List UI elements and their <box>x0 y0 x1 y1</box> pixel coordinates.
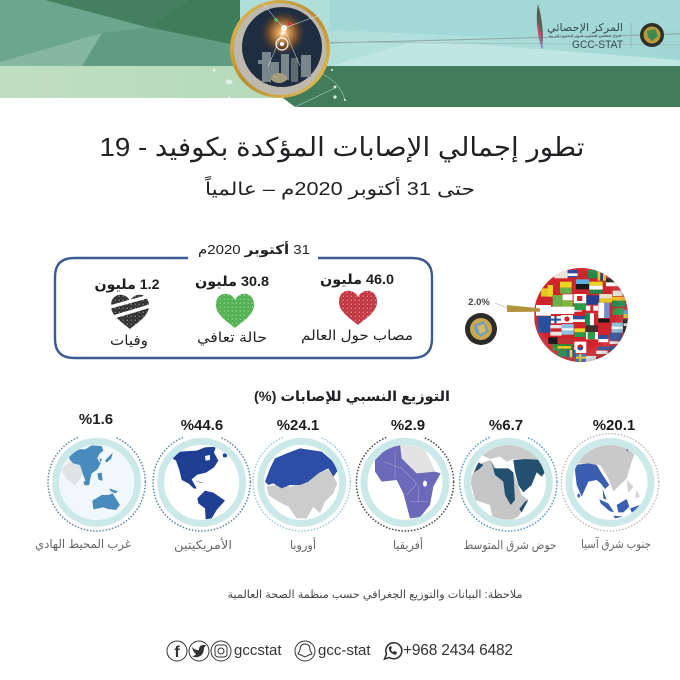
map group: left half <box>48 434 350 531</box>
region labels <box>35 536 651 553</box>
label: Africa: أفريقيا <box>393 537 423 553</box>
callout highlight <box>540 308 582 313</box>
subtitle: حتى 31 أكتوبر 2020م – عالمياً <box>204 176 475 200</box>
handle: gccstat: gccstat <box>234 642 282 659</box>
value: Americas: %44.6 <box>181 417 223 434</box>
callout line <box>495 303 507 308</box>
stat: infected <box>301 271 413 344</box>
GCC-STAT logo: المركز الإحصائي <box>547 22 623 34</box>
value: Eastern Mediterranean: %6.7 <box>489 417 523 434</box>
label: Western Pacific: غرب المحيط الهادي <box>35 537 131 552</box>
GCC-STAT logo: لدول مجلس التعاون لدول الخليج العربية <box>548 34 622 38</box>
value: Africa: %2.9 <box>391 417 425 434</box>
stat: recovered: 30.8 مليون <box>195 273 269 290</box>
stat: infected: 46.0 مليون <box>320 271 394 288</box>
footer contacts <box>167 641 513 661</box>
icon: facebook <box>167 641 187 661</box>
callout wedge: GCC share <box>507 305 561 312</box>
flag globe <box>465 267 632 367</box>
label: South-East Asia: جنوب شرق آسيا <box>581 536 651 552</box>
map group: right half <box>356 434 659 531</box>
phone number: +968 2434 6482 <box>403 642 513 659</box>
value: Europe: %24.1 <box>277 417 319 434</box>
map: Europe <box>253 434 350 531</box>
value: Western Pacific: %1.6 <box>79 411 113 428</box>
label: Eastern Mediterranean: حوض شرق المتوسط <box>464 538 556 553</box>
icon: snapchat <box>295 641 315 661</box>
section heading: التوزيع النسبي للإصابات (%) <box>254 388 450 405</box>
map: South-East Asia <box>561 434 659 531</box>
map: Eastern Mediterranean <box>460 434 557 531</box>
percentages <box>79 411 635 434</box>
date label: 31 أكتوبر 2020م <box>198 241 310 257</box>
label: Europe: أوروبا <box>290 537 316 553</box>
icon: whatsapp <box>384 643 402 659</box>
header constellation dots <box>212 68 346 107</box>
icon: instagram <box>211 641 231 661</box>
medallion image <box>230 0 330 98</box>
map: Western Pacific <box>48 434 145 531</box>
stat: deaths: 1.2 مليون <box>94 276 160 293</box>
title: تطور إجمالي الإصابات المؤكدة بكوفيد - 19 <box>99 132 584 163</box>
label: Americas: الأمريكيتين <box>174 537 232 553</box>
icon: GCC emblem <box>465 313 497 345</box>
stat: infected: مصاب حول العالم <box>301 327 413 344</box>
header banner <box>0 0 680 107</box>
stat: recovered: حالة تعافي <box>197 329 267 346</box>
icon: twitter <box>189 641 209 661</box>
value: South-East Asia: %20.1 <box>593 417 635 434</box>
stat: deaths: وفيات <box>110 332 148 349</box>
handle: gcc-stat: gcc-stat <box>318 642 371 659</box>
stat: deaths <box>94 276 160 349</box>
note: ملاحظة: البيانات والتوزيع الجغرافي حسب منظمة الصحة العالمية <box>228 589 523 601</box>
GCC-STAT logo: GCC-STAT <box>572 39 623 51</box>
map: Americas <box>153 434 250 531</box>
GCC-STAT logo <box>537 4 664 51</box>
panel: world totals <box>55 241 432 358</box>
icon: facebook: f <box>174 644 180 661</box>
map: Africa <box>356 434 454 531</box>
callout value: 2.0% <box>468 297 490 308</box>
stat: recovered <box>195 273 269 346</box>
